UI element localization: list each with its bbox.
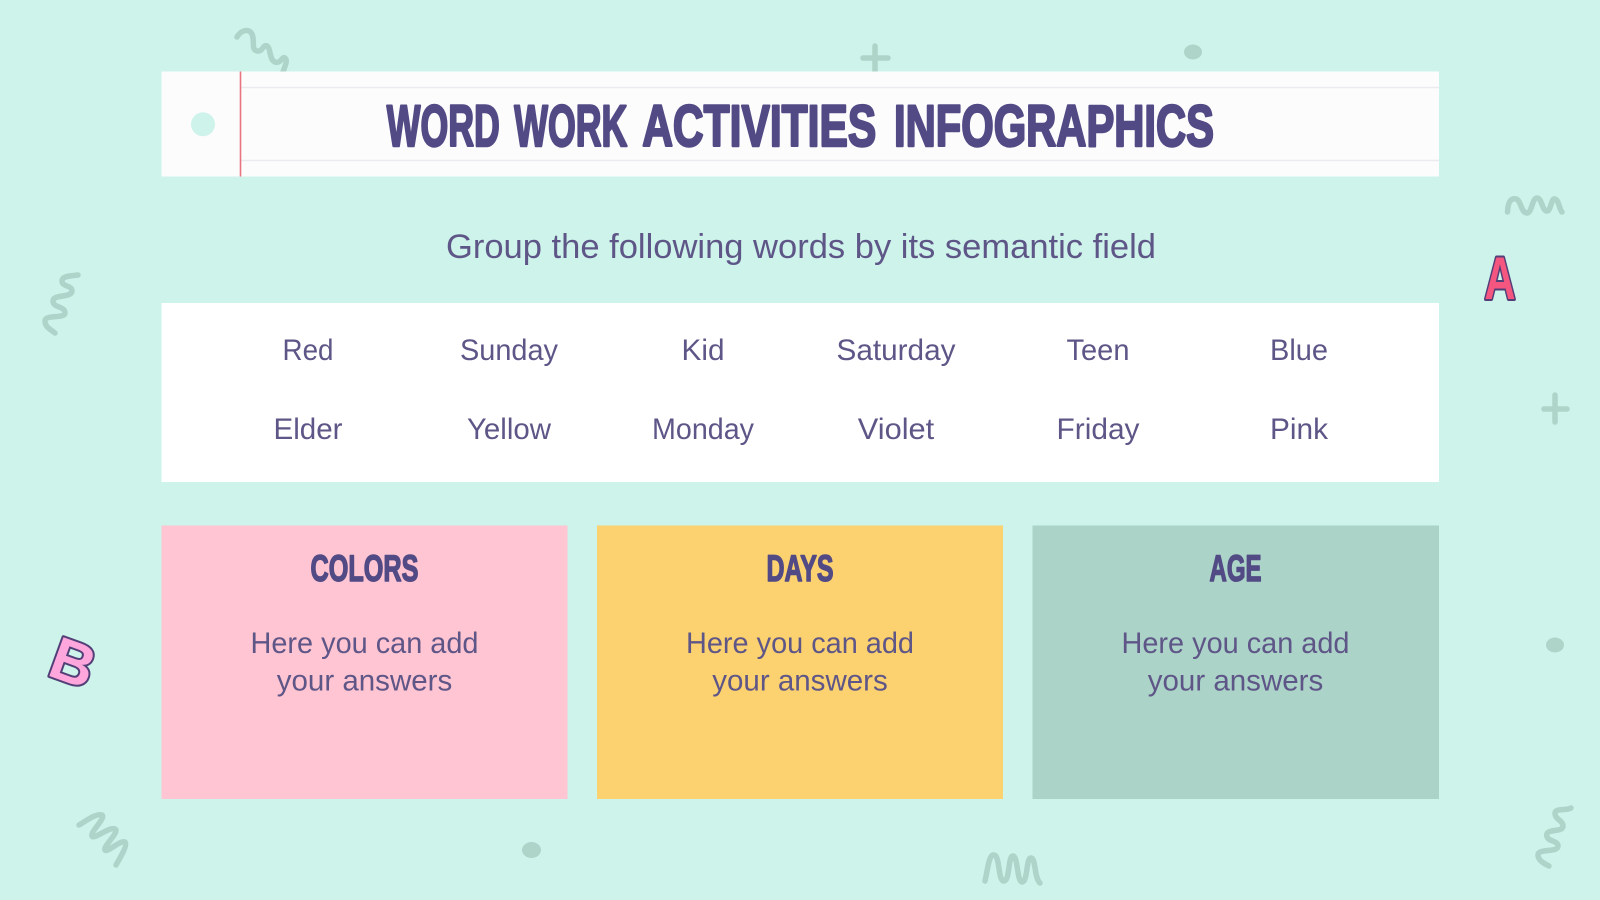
heading: days: DAYS	[766, 548, 834, 589]
answer text: colors: Here you can add	[250, 627, 478, 660]
word row 2	[274, 413, 1329, 446]
word row 2: Friday	[1056, 413, 1140, 446]
decoration: squiggle bottom left	[79, 815, 126, 865]
answer text: age	[1122, 627, 1350, 698]
decoration: squiggle left	[45, 275, 78, 333]
icon: letter B: B	[41, 624, 105, 702]
answer text: colors: your answers	[277, 664, 452, 698]
decoration: dot right	[1546, 638, 1564, 652]
answer text: days	[686, 627, 914, 698]
word row 2: Yellow	[467, 413, 551, 446]
answer text: days: your answers	[712, 664, 888, 698]
subtitle: Group the following words by its semantic field	[446, 228, 1156, 266]
decoration: squiggle top left	[237, 30, 286, 72]
word row 1: Blue	[1270, 334, 1328, 367]
answer text: days: Here you can add	[686, 627, 914, 660]
word row 1: Kid	[682, 334, 724, 367]
decoration: squiggle bottom right	[1538, 808, 1571, 866]
title	[387, 94, 1214, 159]
heading: colors: COLORS	[310, 548, 418, 589]
decoration: plus right	[1544, 395, 1567, 422]
word row 2: Elder	[274, 413, 342, 446]
word row 1: Sunday	[460, 334, 558, 367]
panel: age	[1032, 526, 1439, 799]
word row 1: Saturday	[836, 334, 956, 367]
panel: title notebook strip	[162, 72, 1439, 176]
panel: word bank	[162, 303, 1439, 482]
word row 2: Violet	[858, 413, 935, 446]
word row 2: Monday	[652, 413, 754, 446]
title: WORD	[387, 94, 500, 159]
decoration: dot top	[1184, 44, 1202, 60]
heading: age: AGE	[1210, 548, 1262, 589]
panel: colors	[162, 526, 568, 799]
word row 1: Teen	[1066, 334, 1130, 367]
title: ACTIVITIES	[642, 94, 876, 159]
word row 2: Pink	[1270, 413, 1329, 446]
notebook punch hole	[191, 112, 215, 136]
decoration: squiggle bottom middle	[985, 855, 1040, 883]
decoration: squiggle right	[1508, 198, 1562, 213]
answer text: colors	[250, 627, 478, 698]
answer text: age: your answers	[1148, 664, 1323, 698]
title: WORK	[514, 94, 627, 159]
notebook margin line	[240, 72, 241, 176]
panel: days	[597, 526, 1003, 799]
icon: letter A: A	[1484, 246, 1516, 313]
decoration: dot bottom	[522, 842, 541, 858]
title: INFOGRAPHICS	[894, 94, 1214, 159]
word row 1: Red	[282, 334, 334, 367]
answer text: age: Here you can add	[1122, 627, 1350, 660]
word row 1	[282, 334, 1328, 367]
decoration: plus top	[863, 46, 888, 72]
